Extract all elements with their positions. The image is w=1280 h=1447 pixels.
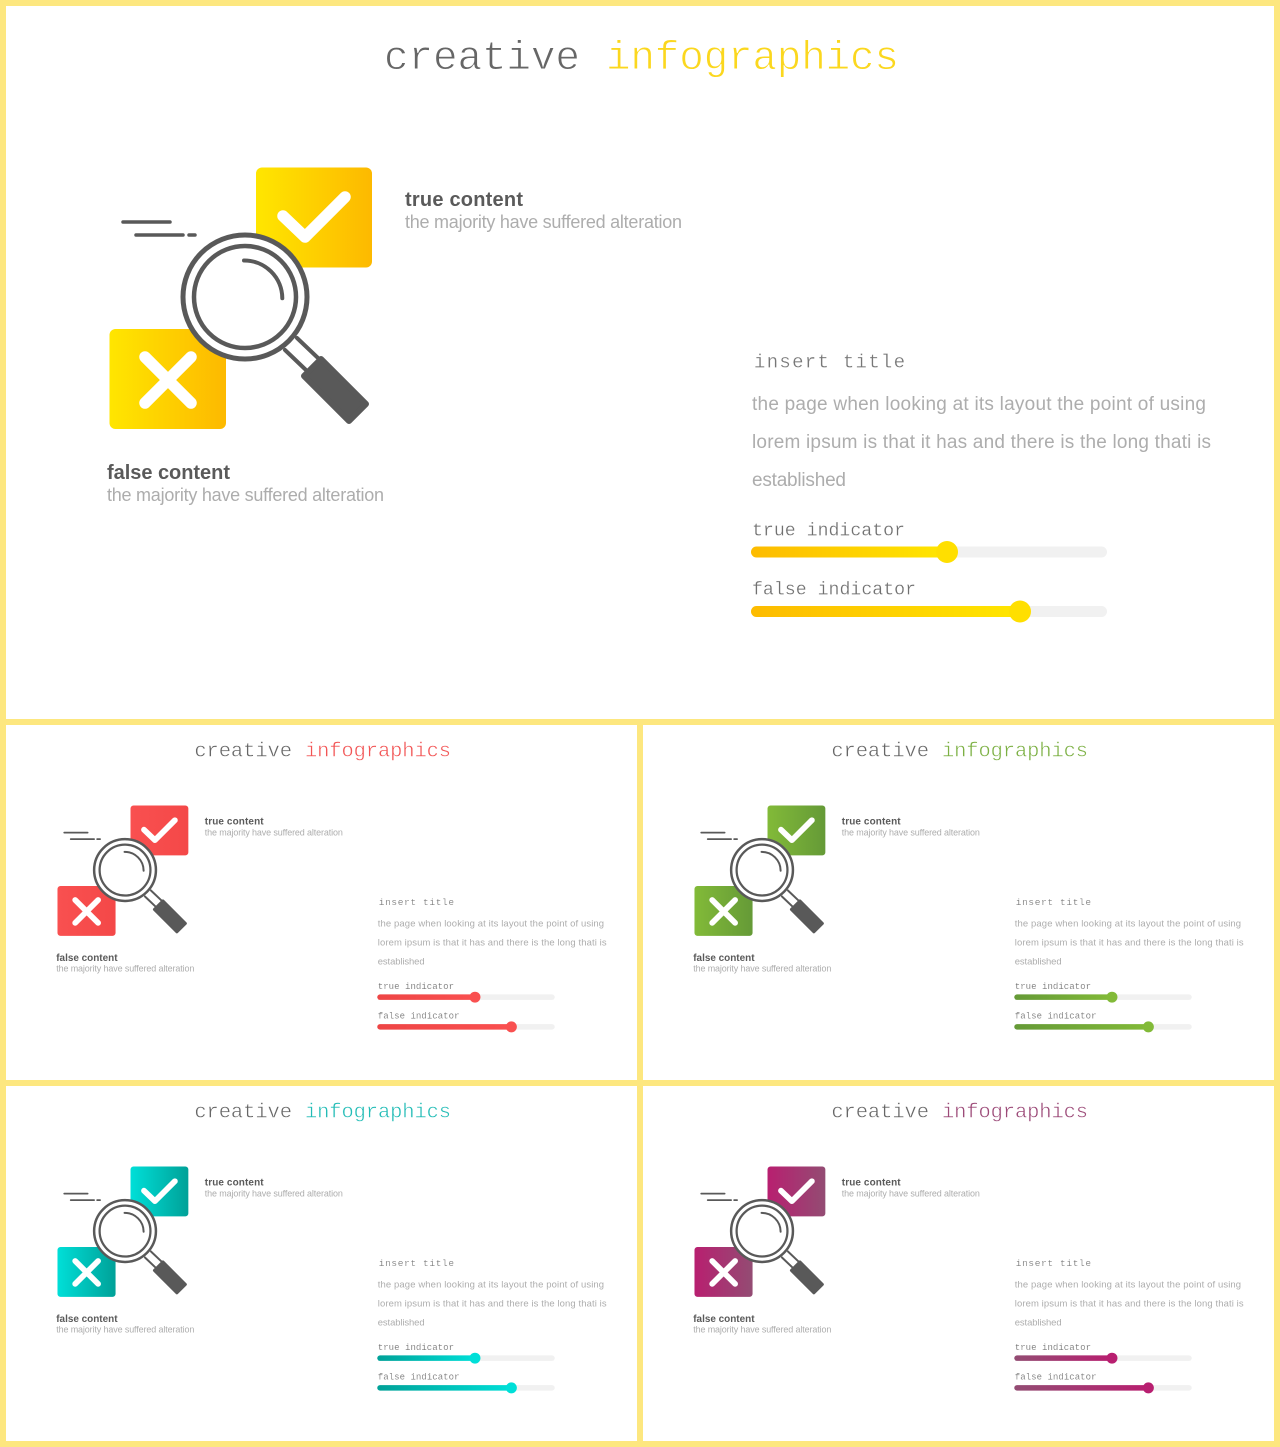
panel: red slide <box>56 740 607 1032</box>
icon: speed lines <box>701 1194 737 1200</box>
label: true content <box>842 817 980 838</box>
icon: cross box <box>57 1247 116 1297</box>
icon: speed lines <box>701 833 737 839</box>
title: infographics <box>305 740 451 763</box>
icon: speed lines <box>64 1194 100 1200</box>
slider: true indicator: true indicator <box>1015 981 1091 992</box>
slider: true indicator <box>377 981 555 1003</box>
icon: check box <box>256 168 372 268</box>
title: infographics <box>942 740 1088 763</box>
text block: insert title <box>378 1258 607 1328</box>
label: false content: the majority have suffered alteration <box>693 1325 831 1335</box>
panel: teal slide <box>56 1101 607 1393</box>
title: infographics <box>942 1101 1088 1124</box>
title <box>384 36 899 82</box>
slider: true indicator <box>377 1342 555 1364</box>
text block: insert title: established <box>378 1317 425 1328</box>
title: creative <box>384 36 580 82</box>
text block: insert title: established <box>752 470 846 491</box>
text block: insert title <box>378 897 607 967</box>
label: false content <box>693 953 831 974</box>
text block: insert title: established <box>378 956 425 967</box>
icon: cross box <box>694 1247 753 1297</box>
slider: true indicator: true indicator <box>378 981 454 992</box>
panel: green slide background <box>643 725 1274 1080</box>
label: false content <box>56 953 194 974</box>
text block: insert title: the page when looking at its layout the point of using <box>378 1279 604 1290</box>
icon: magnifying glass <box>183 235 366 421</box>
text block: insert title <box>1015 1258 1244 1328</box>
label: true content: the majority have suffered alteration <box>205 1189 343 1199</box>
icon: cross box <box>57 886 116 936</box>
slider: false indicator <box>377 1010 555 1032</box>
text block: insert title: lorem ipsum is that it has and there is the long thati is <box>378 1298 607 1309</box>
icon: check box <box>131 1166 188 1216</box>
panel: magenta slide background <box>643 1086 1274 1441</box>
label: false content: false content <box>693 953 755 964</box>
icon: magnifying glass <box>731 1200 822 1293</box>
text block: insert title: the page when looking at its layout the point of using <box>1015 918 1241 929</box>
label: true content: true content <box>842 817 901 828</box>
icon: speed lines <box>64 833 100 839</box>
panel: yellow main slide <box>6 6 1274 719</box>
label: false content: the majority have suffered alteration <box>693 964 831 974</box>
label: true content <box>842 1178 980 1199</box>
text block: insert title: the page when looking at its layout the point of using <box>1015 1279 1241 1290</box>
title: creative <box>194 1101 292 1124</box>
text block: insert title: the page when looking at its layout the point of using <box>752 394 1206 415</box>
panel: red slide background <box>6 725 637 1080</box>
slider: false indicator: false indicator <box>378 1010 460 1021</box>
text block: insert title: lorem ipsum is that it has and there is the long thati is <box>1015 1298 1244 1309</box>
panel: green slide <box>693 740 1244 1032</box>
title <box>194 1101 451 1124</box>
label: true content: true content <box>842 1178 901 1189</box>
icon: magnifying glass <box>94 839 185 932</box>
text block: insert title <box>1015 897 1244 967</box>
slider: true indicator <box>1014 981 1192 1003</box>
slider: false indicator: false indicator <box>752 580 916 600</box>
text block: insert title: insert title <box>379 1258 454 1269</box>
label: true content <box>205 817 343 838</box>
icon: check box <box>768 805 825 855</box>
panel: magenta slide <box>693 1101 1244 1393</box>
title: infographics <box>606 36 899 82</box>
slider: false indicator <box>377 1371 555 1393</box>
slider: false indicator: false indicator <box>378 1371 460 1382</box>
label: false content: the majority have suffered alteration <box>107 485 384 505</box>
label: true content <box>205 1178 343 1199</box>
title <box>194 740 451 763</box>
text block: insert title: insert title <box>1016 897 1091 908</box>
slider: true indicator: true indicator <box>752 522 905 542</box>
label: false content: false content <box>56 1314 118 1325</box>
icon: check box <box>131 805 188 855</box>
text block: insert title: insert title <box>379 897 454 908</box>
slider: false indicator <box>1014 1371 1192 1393</box>
icon: magnifying glass <box>94 1200 185 1293</box>
label: true content: true content <box>205 1178 264 1189</box>
label: false content: the majority have suffered alteration <box>56 964 194 974</box>
text block: insert title <box>752 352 1211 491</box>
panel: teal slide background <box>6 1086 637 1441</box>
label: true content: the majority have suffered alteration <box>842 828 980 838</box>
slider: false indicator <box>1014 1010 1192 1032</box>
label: true content: the majority have suffered alteration <box>405 212 682 232</box>
title <box>831 1101 1088 1124</box>
slider: false indicator <box>751 580 1107 622</box>
label: false content: the majority have suffered alteration <box>56 1325 194 1335</box>
slider: true indicator: true indicator <box>1015 1342 1091 1353</box>
label: false content <box>107 462 384 505</box>
text block: insert title: insert title <box>754 352 905 374</box>
title: creative <box>831 740 929 763</box>
label: true content: the majority have suffered alteration <box>842 1189 980 1199</box>
title: creative <box>194 740 292 763</box>
title <box>831 740 1088 763</box>
label: false content: false content <box>56 953 118 964</box>
slider: true indicator <box>751 522 1107 563</box>
icon: speed lines <box>123 222 195 235</box>
text block: insert title: the page when looking at its layout the point of using <box>378 918 604 929</box>
label: true content: true content <box>405 189 523 211</box>
label: false content: false content <box>107 462 230 484</box>
text block: insert title: established <box>1015 1317 1062 1328</box>
text block: insert title: established <box>1015 956 1062 967</box>
icon: check box <box>768 1166 825 1216</box>
slider: true indicator <box>1014 1342 1192 1364</box>
label: true content <box>405 189 682 232</box>
title: infographics <box>305 1101 451 1124</box>
title: creative <box>831 1101 929 1124</box>
slider: false indicator: false indicator <box>1015 1371 1097 1382</box>
text block: insert title: insert title <box>1016 1258 1091 1269</box>
text block: insert title: lorem ipsum is that it has and there is the long thati is <box>752 432 1211 453</box>
text block: insert title: lorem ipsum is that it has and there is the long thati is <box>1015 937 1244 948</box>
icon: cross box <box>110 329 226 429</box>
label: true content: true content <box>205 817 264 828</box>
text block: insert title: lorem ipsum is that it has and there is the long thati is <box>378 937 607 948</box>
icon: magnifying glass <box>731 839 822 932</box>
label: false content <box>693 1314 831 1335</box>
slider: false indicator: false indicator <box>1015 1010 1097 1021</box>
icon: cross box <box>694 886 753 936</box>
slider: true indicator: true indicator <box>378 1342 454 1353</box>
label: false content: false content <box>693 1314 755 1325</box>
label: true content: the majority have suffered alteration <box>205 828 343 838</box>
label: false content <box>56 1314 194 1335</box>
